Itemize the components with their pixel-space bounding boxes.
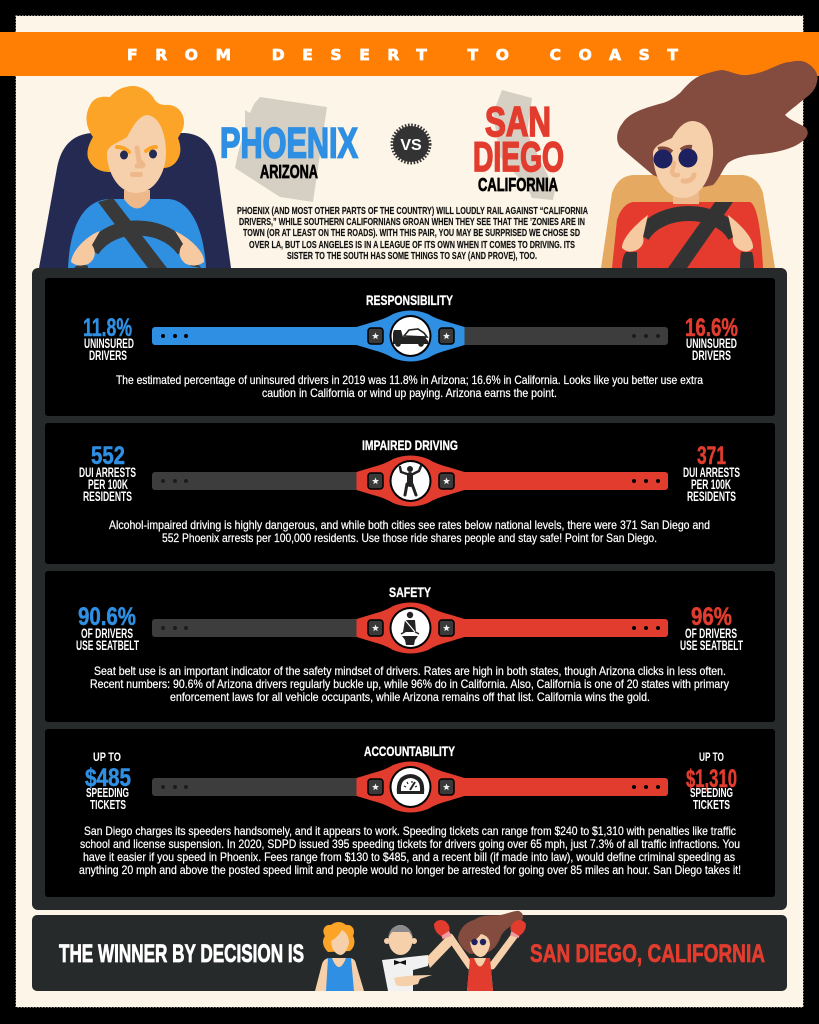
intro text: SISTER TO THE SOUTH HAS SOME THINGS TO SAY (AND PROVE), TOO. [287,251,537,262]
city: Phoenix: PHOENIX [220,120,358,168]
illustration: referee [382,925,456,991]
stat: Phoenix DUI: PER 100K [88,477,128,492]
description: 552 Phoenix arrests per 100,000 residents. Use those ride shares people and stay safe! Point for San Diego. [162,531,657,545]
stat: California uninsured: DRIVERS [692,348,731,363]
city: San Diego: SAN [485,98,551,145]
description: have it easier if you speed in Phoenix. Fees range from $130 to $485, and a recent bill (if made into law), would define criminal speeding as [83,850,735,864]
stat: California uninsured [685,314,738,363]
stat: Phoenix tickets: SPEEDING [86,785,129,800]
title: FROM DESERT TO COAST [127,46,678,64]
illustration: loser [315,922,364,991]
description: anything 20 mph and above the posted speed limit and people would no longer be arrested for going over 85 miles an hour. San Diego takes it! [79,863,741,877]
description [116,373,703,400]
stat: California seatbelt: OF DRIVERS [685,626,737,641]
panel: accountability [45,729,775,897]
icon: drunk person [400,466,421,495]
description: enforcement laws for all vehicle occupants, while Arizona remains off that list. California wins the gold. [170,690,650,704]
stat: Phoenix tickets: UP TO [93,752,121,764]
stat: Arizona uninsured: UNINSURED [84,336,134,351]
description [90,664,729,704]
state map: Arizona [235,97,327,202]
intro text: OVER LA, BUT LOS ANGELES IS IN A LEAGUE OF ITS OWN WHEN IT COMES TO DRIVING. ITS [249,240,575,251]
heading: ACCOUNTABILITY [364,744,455,759]
panel: impaired driving [45,423,775,564]
panel: responsibility [45,278,775,416]
city: San Diego [473,98,564,195]
stat: Phoenix tickets: $485 [85,764,131,792]
stat: San Diego DUI [683,442,740,504]
stat: San Diego tickets: UP TO [699,752,724,764]
stat: Phoenix tickets: TICKETS [90,797,126,812]
stat: Phoenix DUI [79,442,136,504]
winner label: THE WINNER BY DECISION IS [59,940,304,968]
stat: Phoenix DUI: DUI ARRESTS [79,465,136,480]
description: Seat belt use is an important indicator of the safety mindset of drivers. Rates are high in both states, though Arizona clicks in less often. [94,664,726,678]
panel: winner [32,911,787,991]
stat: Arizona seatbelt: USE SEATBELT [76,638,139,653]
stat: San Diego tickets: $1,310 [686,765,737,793]
panel: safety [45,571,775,722]
description: The estimated percentage of uninsured drivers in 2019 was 11.8% in Arizona; 16.6% in California. Looks like you better use extra [116,373,703,387]
versus badge: VS [400,137,422,154]
belt: Arizona wins [152,310,668,362]
belt: San Diego wins [152,456,668,506]
stat: San Diego tickets: SPEEDING [690,785,733,800]
stat: Arizona uninsured: 11.8% [83,314,132,342]
icon: tow truck [393,329,428,347]
banner [0,32,819,76]
driver: Phoenix [39,86,231,268]
stat: San Diego tickets [686,752,737,812]
icon: speedometer [397,774,424,794]
description: San Diego charges its speeders handsomely, and it appears to work. Speeding tickets can range from $240 to $1,310 with penalties like traffic [84,824,736,838]
stat: San Diego DUI: 371 [697,442,726,470]
belt: San Diego wins [152,762,668,812]
stat: California seatbelt: 96% [691,603,732,631]
intro text [237,206,588,262]
stat: Arizona seatbelt [76,603,139,653]
stat: California seatbelt [680,603,743,653]
stat: Arizona seatbelt: OF DRIVERS [81,626,133,641]
stat: Phoenix tickets [85,752,131,812]
stat: Phoenix DUI: RESIDENTS [83,489,132,504]
stat: San Diego DUI: DUI ARRESTS [683,465,740,480]
stat: California uninsured: UNINSURED [686,336,737,351]
stat: Phoenix DUI: 552 [91,442,125,470]
icon: seatbelt [401,612,419,645]
stat: California seatbelt: USE SEATBELT [680,638,743,653]
description: Recent numbers: 90.6% of Arizona drivers regularly buckle up, while 96% do in California. Also, California is one of 20 states with primary [90,677,729,691]
state name: Arizona: ARIZONA [260,162,318,182]
state map: California [493,90,555,200]
heading: RESPONSIBILITY [366,293,453,308]
intro text: PHOENIX (AND MOST OTHER PARTS OF THE COUNTRY) WILL LOUDLY RAIL AGAINST “CALIFORNIA [237,206,588,217]
intro text: TOWN (OR AT LEAST ON THE ROADS). WITH THIS PAIR, YOU MAY BE SURPRISED WE CHOSE SD [243,228,580,239]
illustration: winner boxer [434,911,526,991]
heading: SAFETY [389,585,431,600]
description [109,518,710,545]
description [79,824,741,877]
belt: California wins [152,602,668,654]
stat: Arizona uninsured: DRIVERS [89,348,127,363]
stat: Arizona uninsured [83,314,134,363]
driver: San Diego [601,61,818,268]
state name: California: CALIFORNIA [478,175,558,195]
description: school and license suspension. In 2020, SDPD issued 395 speeding tickets for drivers going over 65 mph, just 7.3% of all traffic infractions. You [80,837,740,851]
stat: California uninsured: 16.6% [685,314,738,342]
description: caution in California or wind up paying. Arizona earns the point. [262,386,557,400]
stat: San Diego DUI: RESIDENTS [687,489,736,504]
stat: San Diego tickets: TICKETS [693,797,730,812]
city: Phoenix [220,120,358,182]
versus badge [392,125,430,163]
panel: comparison board [32,268,787,910]
description: Alcohol-impaired driving is highly dangerous, and while both cities see rates below national levels, there were 371 San Diego and [109,518,710,532]
intro text: DRIVERS,” WHILE SOUTHERN CALIFORNIANS GROAN WHEN THEY SEE THAT THE ’ZONIES ARE IN [239,217,585,228]
heading: IMPAIRED DRIVING [362,438,458,453]
city: San Diego: DIEGO [473,133,564,180]
stat: Arizona seatbelt: 90.6% [78,603,136,631]
stat: San Diego DUI: PER 100K [691,477,731,492]
